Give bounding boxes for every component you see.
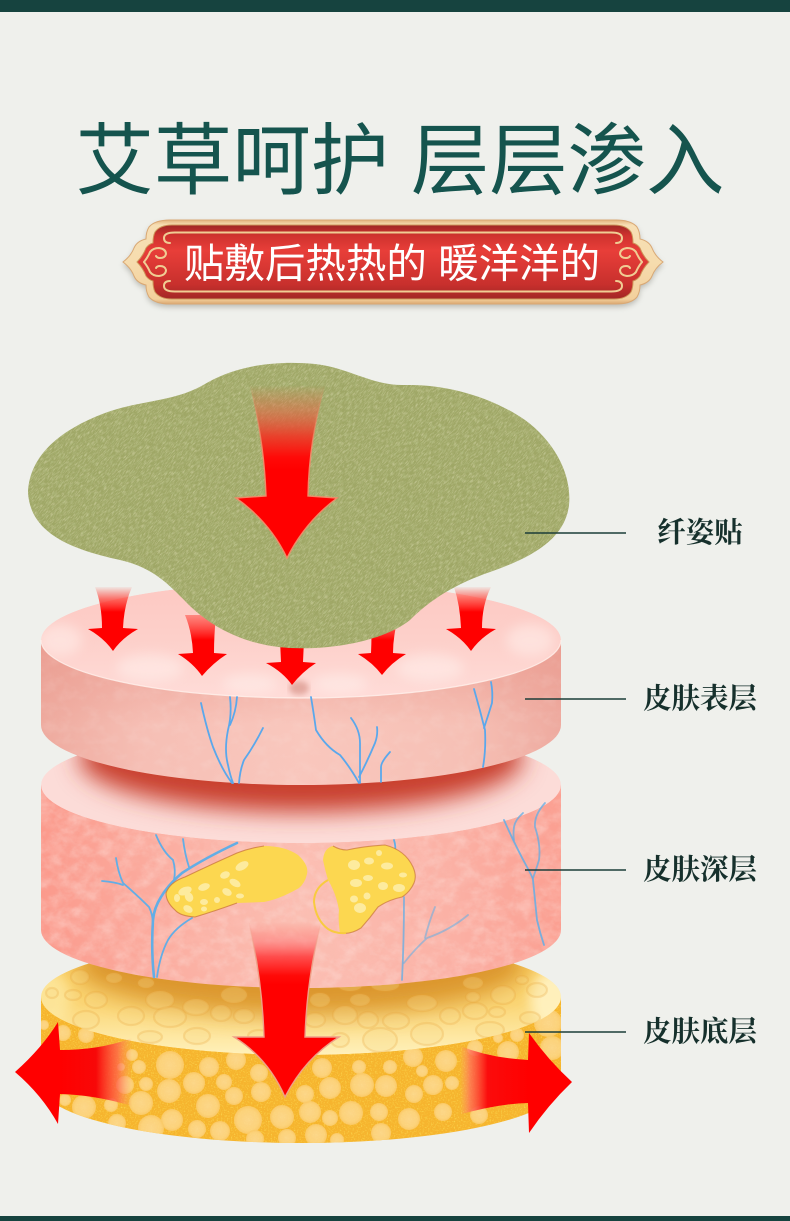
bottom bar: [0, 1216, 790, 1221]
small arrow 4: [358, 615, 406, 675]
side wall: [39, 997, 564, 1148]
side wall: [41, 640, 561, 790]
arrow: down into fat layer: [234, 915, 339, 1097]
side wall: [41, 785, 561, 990]
banner: subtitle ribbon: [123, 220, 663, 307]
top surface: [38, 582, 561, 698]
arrow: left spread: [15, 1022, 145, 1124]
fat cell: right: [314, 845, 415, 933]
ornament: inner frame lines: [144, 232, 642, 292]
banner text: 贴敷后热热的 暖洋洋的: [184, 240, 600, 286]
ornament: right scroll: [620, 248, 642, 276]
small arrow 5: [446, 587, 496, 651]
veins: surface layer: [201, 682, 492, 783]
arrow: through patch: [236, 385, 337, 558]
layer: skin deep: [41, 756, 561, 988]
small arrow 3: [266, 640, 316, 685]
callout: skin surface: 皮肤表层: [643, 683, 758, 715]
arrows on skin surface: [88, 587, 496, 685]
callout: skin base: 皮肤底层: [643, 1015, 758, 1048]
veins: deep layer: [102, 803, 545, 980]
moxa patch: [28, 362, 570, 648]
layer: skin base (yellow fat): [41, 964, 561, 1143]
surface rim: [41, 640, 561, 698]
fat cell: left: [166, 846, 307, 917]
title: 艾草呵护 层层渗入: [76, 117, 724, 205]
layer: skin surface: [38, 582, 561, 790]
ornament: left scroll: [144, 248, 166, 276]
arrow: right spread: [452, 1033, 572, 1133]
top bar: [0, 0, 790, 12]
top surface: [41, 964, 561, 1055]
top surface: [41, 756, 561, 843]
callout: skin deep: 皮肤深层: [643, 854, 758, 886]
small arrow 1: [88, 587, 138, 651]
callout: patch: 纤姿贴: [657, 517, 743, 549]
small arrow 2: [178, 615, 227, 676]
